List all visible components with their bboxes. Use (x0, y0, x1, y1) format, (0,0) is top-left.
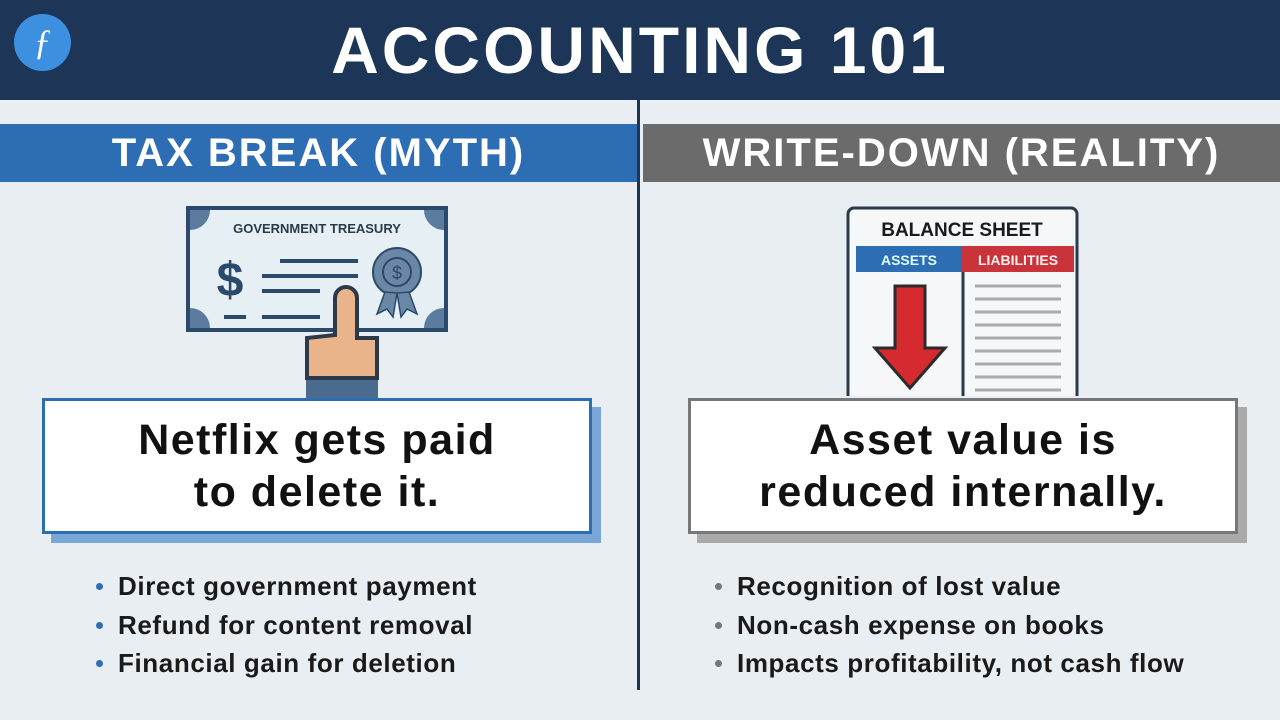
callout: myth: Netflix gets paid (138, 416, 496, 464)
icon: government check with hand (186, 206, 448, 398)
callout: reality: Asset value is (809, 416, 1117, 464)
icon: balance sheet: BALANCE SHEET (881, 220, 1043, 241)
icon: balance sheet: LIABILITIES (978, 252, 1058, 268)
callout: reality: reduced internally. (759, 468, 1167, 516)
icon: government check with hand: GOVERNMENT TREASURY (233, 221, 401, 236)
icon: balance sheet (846, 206, 1078, 396)
divider (637, 100, 640, 690)
panel: myth heading: TAX BREAK (MYTH) (112, 131, 525, 175)
list: reality bullets (715, 571, 1184, 678)
icon: balance sheet: ASSETS (881, 252, 937, 268)
callout: myth: to delete it. (194, 468, 440, 516)
panel: reality heading: WRITE-DOWN (REALITY) (703, 131, 1220, 175)
icon: government check with hand: $ (392, 263, 402, 283)
list: reality bullets: Impacts profitability, not cash flow (737, 648, 1184, 678)
panel: myth heading (0, 124, 637, 182)
panel: reality heading (643, 124, 1280, 182)
callout: reality (688, 398, 1238, 534)
list: myth bullets: Refund for content removal (118, 610, 473, 640)
callout: myth (42, 398, 592, 534)
list: myth bullets (96, 571, 477, 678)
list: reality bullets: Recognition of lost value (737, 571, 1061, 601)
list: myth bullets: Financial gain for deletion (118, 648, 456, 678)
list: myth bullets: Direct government payment (118, 571, 477, 601)
title: ACCOUNTING 101 (331, 13, 949, 87)
logo: ƒ (34, 22, 52, 62)
list: reality bullets: Non-cash expense on books (737, 610, 1105, 640)
icon: government check with hand: $ (217, 254, 244, 307)
logo (14, 14, 71, 71)
header (0, 0, 1280, 100)
